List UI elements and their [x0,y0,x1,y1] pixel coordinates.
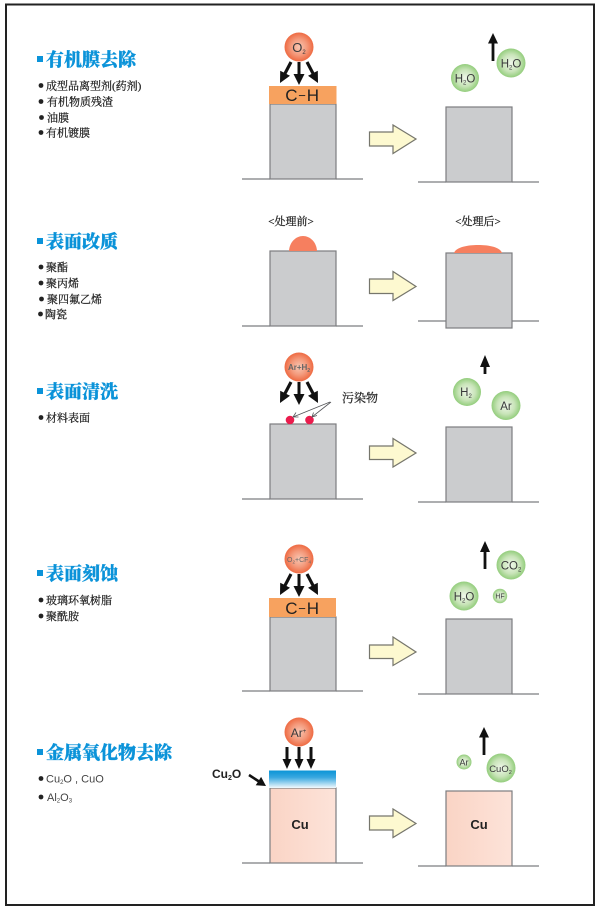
pointer arrows [293,402,331,417]
Cu label: Cu [470,817,488,832]
arrow: surface cleaning process [370,438,416,467]
O2+CF4 ball: 4 [308,560,311,564]
diagram: surface modification before [242,214,363,326]
panel: organic film removal text [37,49,142,140]
list: surface etching items: 聚酰胺 [46,609,80,623]
H2O ball: O [465,592,474,604]
list: organic film items: 油膜 [47,110,69,124]
diagram: surface etching before [242,544,363,691]
diagram: metal oxide before [212,718,363,863]
label: Cu2O: O [232,767,241,781]
arrows down [282,747,316,769]
list: metal oxide items: O [60,792,69,804]
C-H layer [269,598,336,618]
CO2 ball: 2 [518,568,522,574]
O2 ball: 2 [302,50,306,56]
arrows down [280,61,318,85]
H2O ball left: 2 [463,80,467,86]
C-H layer: C [285,599,298,618]
Ar+ ball [284,718,314,746]
list: metal oxide items: Cu [46,774,60,786]
H2 ball [453,378,481,406]
diagram: organic film before [242,32,363,179]
H2O ball left: O [466,74,475,86]
droplet [289,236,317,251]
arrow up [479,727,489,755]
heading: surface cleaning: 表面清洗 [46,381,118,402]
H2O ball right: H [501,58,509,70]
O2+CF4 ball [284,544,314,574]
panel: surface etching text [37,563,120,623]
list: surface modification items: 聚丙烯 [46,276,79,290]
HF ball: HF [495,594,505,600]
label: contaminants: 污染物 [342,390,378,405]
H2O ball right: O [512,58,521,70]
C-H layer: − [298,88,307,103]
Ar ball: Ar [500,401,512,413]
list: organic film items: 有机镀膜 [46,126,90,140]
H2O ball right [496,48,526,78]
diagram: metal oxide after [418,727,539,866]
Cu2O layer [269,770,336,788]
CuO2 ball [486,754,516,782]
arrows down [280,381,318,405]
H2 ball: H [460,387,468,399]
O2+CF4 ball: +CF [295,557,308,564]
label: after treatment: <处理后> [455,214,501,228]
panel: metal oxide removal text [37,742,174,804]
arrow up [488,33,498,61]
H2O ball [450,582,478,610]
list: surface modification items: 陶瓷 [45,307,67,321]
diagram: surface modification after [418,214,539,328]
C-H layer: H [307,86,320,105]
H2O ball: H [454,592,462,604]
O2+CF4 ball: O [287,557,292,564]
flattened droplet [454,245,502,253]
CuO2 ball: CuO [489,764,509,775]
list: metal oxide items: Al [47,792,57,804]
contaminant dots [286,416,314,424]
list: organic film items [39,78,142,140]
label: Cu2O: Cu [212,767,228,781]
panel: surface modification text [37,231,118,321]
list: surface modification items [38,260,102,321]
list: organic film items: 有机物质残渣 [47,94,113,108]
Ar+H2 ball [284,352,314,382]
arrow: surface modification process [370,272,416,300]
list: surface modification items: 聚四氟乙烯 [47,292,102,306]
label: Cu2O: 2 [228,775,232,782]
H2O ball left [451,64,479,92]
diagram: organic film after [418,33,539,182]
arrow: metal oxide process [370,809,416,838]
O2 ball: O [292,40,302,55]
list: organic film items: 成型品离型剂(药剂) [46,78,142,92]
diagram: surface cleaning before [242,352,378,499]
Ar+H2 ball: 2 [307,368,310,374]
H2O ball right: 2 [509,66,513,72]
arrow: organic film process [370,125,416,154]
CuO2 ball: 2 [509,770,512,776]
H2 ball: 2 [468,394,472,400]
list: metal oxide items: 3 [69,798,73,804]
diagram: surface cleaning after [418,355,539,502]
list: surface modification items: 聚酯 [46,260,68,274]
Ar+ ball: + [303,729,307,735]
heading: surface modification: 表面改质 [46,231,118,252]
list: metal oxide items [39,774,104,804]
C-H layer: C [285,86,298,105]
O2+CF4 ball: 2 [292,560,296,564]
C-H layer: H [307,599,320,618]
list: surface etching items [39,593,112,623]
list: surface etching items: 玻璃环氧树脂 [46,593,112,607]
Cu label: Cu [291,817,309,832]
Ar ball: Ar [460,758,469,768]
C-H layer [269,86,336,105]
list: surface cleaning items: 材料表面 [46,410,90,424]
list: metal oxide items: 2 [60,780,64,786]
Ar+H2 ball: Ar+H [288,363,307,372]
Ar ball [492,391,520,420]
Ar+ ball: Ar [291,726,303,740]
heading: surface etching: 表面刻蚀 [46,563,120,584]
diagram: surface etching after [418,541,539,694]
arrows down [280,573,318,597]
H2O ball: 2 [462,598,466,604]
arrow up [480,541,490,569]
CO2 ball: CO [501,560,518,572]
O2 ball [284,32,314,62]
arrow to oxide layer [248,774,266,786]
arrow: surface etching process [370,637,416,666]
panel: surface cleaning text [37,381,118,424]
CO2 ball [496,550,526,580]
list: metal oxide items: 2 [57,798,61,804]
H2O ball left: H [455,74,463,86]
label: before treatment: <处理前> [268,214,314,228]
heading: organic film removal: 有机膜去除 [46,49,138,70]
arrow up [480,355,490,374]
C-H layer: − [298,601,307,616]
HF ball [493,589,507,603]
heading: metal oxide removal: 金属氧化物去除 [46,742,174,763]
list: metal oxide items: O , CuO [63,774,104,786]
